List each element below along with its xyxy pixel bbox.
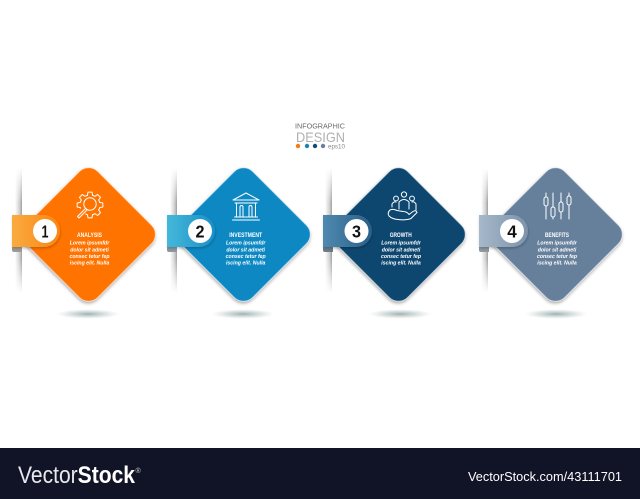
image id: VectorStock.com/43111701 [468,469,622,484]
text block: iscing elit. Nulla [70,261,109,267]
heading: INVESTMENT [229,232,263,239]
number 4 [500,219,524,243]
panel: step 1 analysis [12,162,161,319]
title: DESIGN [296,129,345,145]
title [295,122,345,150]
text block: dolor sit admeti [538,247,577,253]
text block: iscing elit. Nulla [226,261,266,267]
text block: Lorem ipsumfdr [381,241,422,247]
panel: step 4 benefits [479,162,628,319]
panel: step 3 growth [323,162,471,319]
text block: consec tetur fep [537,254,577,260]
heading: ANALYSIS [77,232,102,239]
text block: Lorem ipsumfdr [537,241,578,247]
text block: consec tetur fep [226,254,266,260]
number 2: 2 [196,222,205,242]
footer bar [0,448,640,499]
text block: Lorem ipsumfdr [70,241,110,247]
number 4: 4 [507,222,517,242]
number 3: 3 [352,222,361,242]
heading: BENEFITS [545,232,569,239]
icon: people on hand [388,192,417,220]
icon: gear with magnifier [77,192,103,218]
number 2 [188,219,212,243]
registered mark: ® [136,467,142,475]
VectorStock logo: VectorStock [18,462,136,489]
panel: step 2 investment [167,162,316,319]
text block: iscing elit. Nulla [381,261,421,267]
text block: iscing elit. Nulla [537,261,577,267]
text block: dolor sit admeti [70,247,109,253]
icon: bank [232,193,260,220]
text block: dolor sit admeti [226,247,266,253]
text block: consec tetur fep [381,254,421,260]
title: eps10 [328,144,345,150]
number 3 [344,219,368,243]
number 1 [33,219,57,243]
text block: Lorem ipsumfdr [226,241,266,247]
text block: consec tetur fep [69,254,110,260]
heading: GROWTH [390,232,412,239]
title: INFOGRAPHIC [295,122,345,130]
number 1: 1 [42,222,49,242]
text block: dolor sit admeti [382,247,421,253]
icon: sliders [544,193,571,219]
